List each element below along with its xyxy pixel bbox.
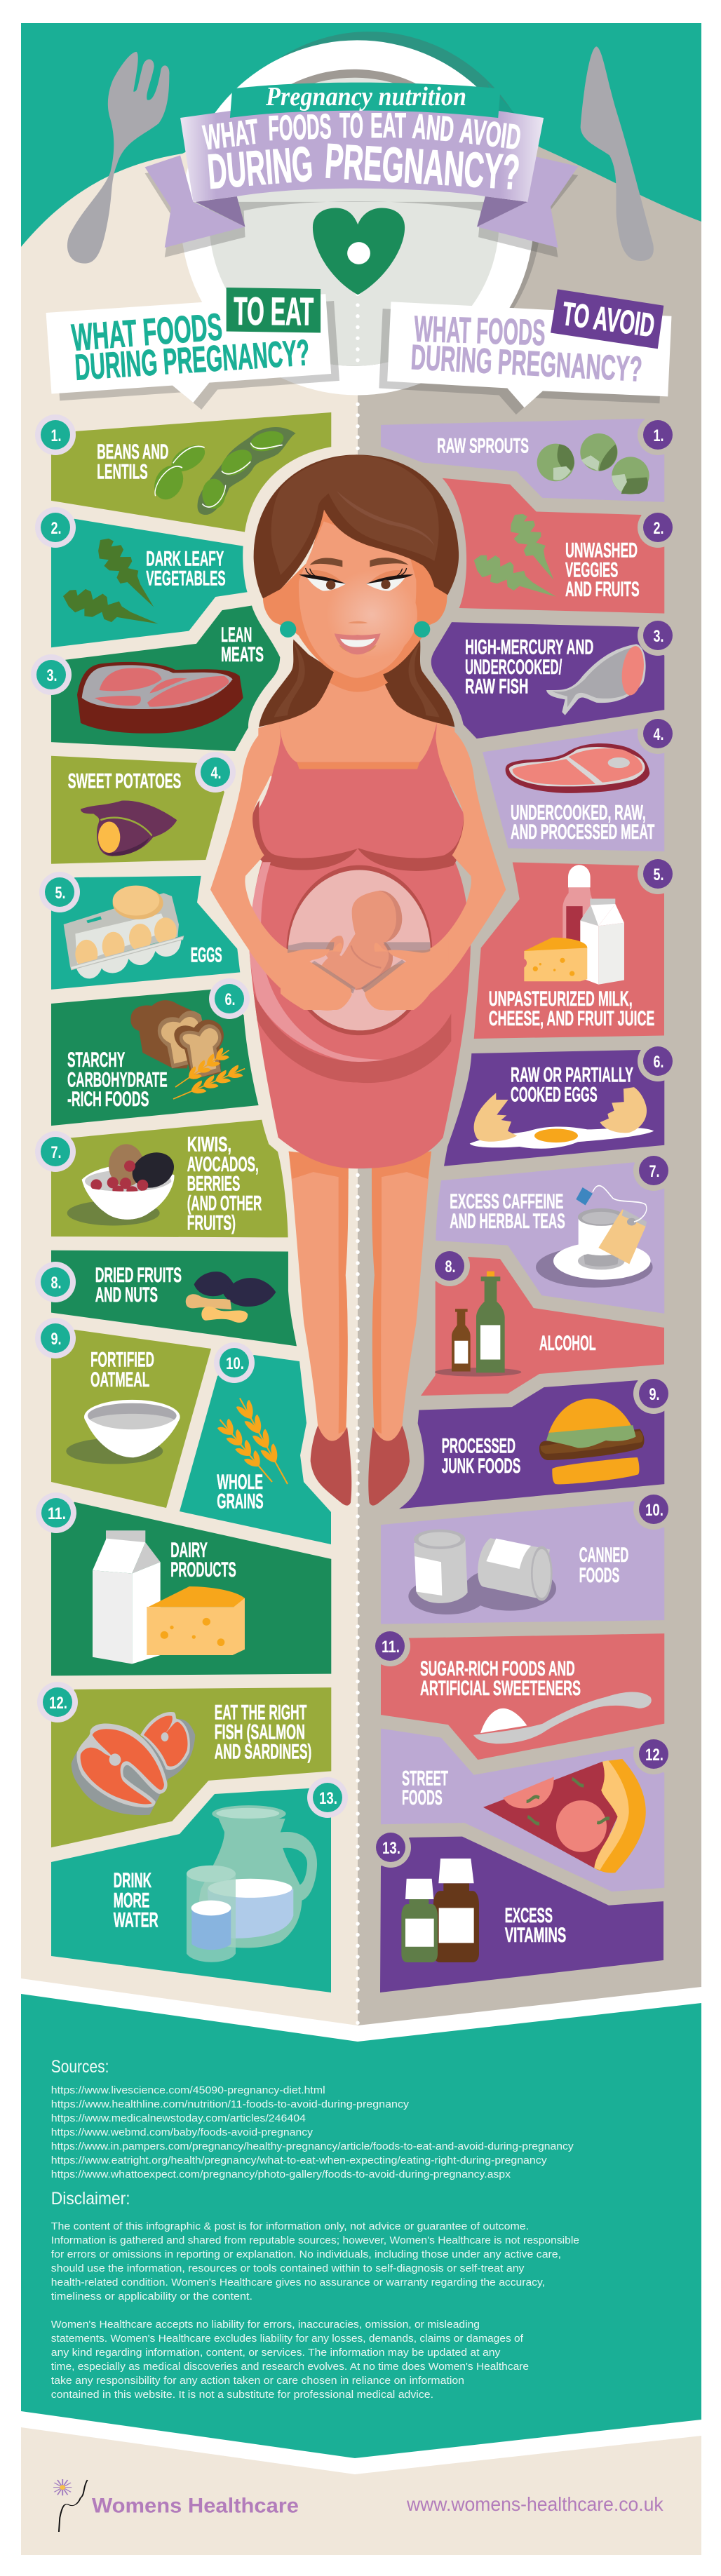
panel: avoid 3 raw fish (431, 615, 678, 739)
panel: 4 sweet potatoes (51, 752, 236, 864)
panel: avoid 12 street foods (381, 1729, 674, 1891)
sources panel (21, 1994, 701, 2458)
disclaimer paragraph 1: should use the information, resources or tools contained within to self-diagnosis or self-treat any (51, 2263, 525, 2274)
mouth (335, 633, 381, 654)
belly band shadow (254, 993, 451, 1083)
badge: 10. (645, 1501, 663, 1520)
label (95, 1264, 182, 1307)
badge: 1. (50, 426, 62, 445)
badge (633, 1373, 674, 1414)
label: AND SARDINES) (215, 1741, 311, 1763)
icon: leaves (469, 508, 566, 607)
source list (51, 2084, 574, 2180)
label (215, 1701, 311, 1763)
label (511, 801, 654, 844)
label: DRIED FRUITS (95, 1264, 182, 1287)
heading: main title: TO (339, 106, 363, 145)
heading: main title: DURING (205, 136, 315, 199)
badge: 1. (654, 426, 663, 445)
brows (310, 558, 409, 567)
label: ARTIFICIAL SWEETENERS (420, 1677, 581, 1700)
source list: https://www.whattoexpect.com/pregnancy/photo-gallery/foods-to-avoid-during-pregnancy.aspx (51, 2169, 511, 2180)
disclaimer paragraph 2: any kind regarding information, content, or services. The information may be updated at any (51, 2347, 501, 2359)
label: MEATS (221, 643, 264, 666)
label: EGGS (191, 944, 222, 967)
disclaimer paragraph 1 (51, 2220, 579, 2302)
badge: 12. (49, 1694, 67, 1713)
badge: 7. (649, 1162, 659, 1181)
disclaimer paragraph 1: The content of this infographic & post is for information only, not advice or guarantee of outcome. (51, 2220, 529, 2232)
label (505, 1904, 566, 1947)
badge (35, 1131, 76, 1172)
label (114, 1869, 159, 1932)
label (90, 1348, 154, 1391)
icon: fork (67, 52, 169, 264)
icon: prunes and nuts (186, 1272, 276, 1323)
badge (638, 414, 678, 455)
label (565, 539, 640, 601)
label: AND HERBAL TEAS (450, 1210, 565, 1233)
hair highlight (271, 454, 439, 575)
disclaimer paragraph 1: timeliness or applicability or the content. (51, 2291, 252, 2302)
disclaimer paragraph 1: health-related condition. Women's Healthcare gives no assurance or warranty regarding the accuracy, (51, 2277, 545, 2288)
icon: womens healthcare logo (53, 2479, 88, 2532)
speech bubble: to eat: TO EAT (234, 289, 314, 334)
label (221, 623, 264, 666)
heading: main title: AVOID (458, 111, 523, 157)
badge: 13. (382, 1839, 400, 1858)
panel: avoid 2 unwashed veggies (443, 478, 678, 614)
label: VITAMINS (505, 1924, 566, 1947)
icon: milk and cheese (93, 1530, 245, 1664)
disclaimer paragraph 2: statements. Women's Healthcare excludes liability for any losses, demands, claims or damages of (51, 2333, 524, 2345)
label: LEAN (221, 623, 252, 647)
panel: avoid 10 canned foods (381, 1489, 674, 1624)
label: RAW SPROUTS (437, 435, 529, 458)
label: DRINK (114, 1869, 151, 1892)
label: WHOLE (217, 1471, 263, 1494)
heading: main title: PREGNANCY? (323, 133, 521, 200)
source list: https://www.medicalnewstoday.com/articles/246404 (51, 2112, 306, 2124)
icon: raw meat (506, 743, 649, 793)
heading: main title: EAT (370, 106, 406, 145)
speech bubble: to avoid: WHAT FOODS (414, 309, 546, 353)
label: BERRIES (187, 1173, 240, 1195)
badge: 13. (319, 1789, 337, 1808)
badge: 11. (382, 1638, 400, 1657)
label: PRODUCTS (170, 1558, 236, 1582)
label: SWEET POTATOES (68, 770, 181, 793)
face (299, 521, 416, 678)
label: FOODS (402, 1786, 443, 1809)
icon: oatmeal bowl (66, 1400, 180, 1464)
icon: bread (130, 1000, 224, 1079)
label (420, 1657, 581, 1700)
badge (35, 1262, 76, 1302)
background: left beige hill (21, 83, 358, 2025)
label: COOKED EGGS (511, 1083, 598, 1106)
badge: 7. (50, 1143, 62, 1162)
badge (209, 978, 250, 1019)
label: DAIRY (170, 1539, 208, 1562)
fetus (321, 891, 402, 990)
source list: https://www.in.pampers.com/pregnancy/healthy-pregnancy/article/foods-to-eat-and-avoid-during-pregnancy (51, 2140, 574, 2152)
icon: leaves (60, 532, 165, 635)
eyes (299, 568, 413, 591)
icon: egg carton (64, 886, 184, 978)
icon: salmon steaks (72, 1712, 195, 1815)
label: FRUITS) (187, 1211, 236, 1234)
nose (348, 621, 368, 623)
icon: vitamin bottles (401, 1859, 479, 1962)
icon: steak (77, 662, 243, 734)
badge: 11. (48, 1504, 66, 1523)
label (579, 1544, 628, 1587)
hair strand (337, 491, 434, 546)
badge: 9. (649, 1385, 659, 1404)
badge (31, 654, 72, 695)
source list: https://www.eatright.org/health/pregnancy/what-to-eat-when-expecting/eating-right-during-pregnancy (51, 2154, 547, 2166)
badge: 8. (50, 1274, 62, 1293)
head (254, 454, 459, 692)
badge (638, 713, 678, 754)
label (146, 547, 226, 591)
label (97, 440, 168, 484)
icon: burger (539, 1398, 645, 1484)
badge (35, 1318, 76, 1358)
panel: 2 dark leafy vegetables (35, 507, 248, 647)
label: FISH (SALMON (215, 1720, 305, 1744)
disclaimer paragraph 1: for errors or omissions in reporting or explanation. No individuals, including those under any active care, (51, 2248, 561, 2260)
dress and belly (249, 723, 471, 1168)
label: STARCHY (67, 1048, 125, 1072)
badge (214, 1342, 255, 1383)
arms (210, 723, 506, 1011)
icon: fruit bowl (67, 1144, 176, 1225)
background: right grey hill (358, 83, 701, 2025)
icon: sprouts (537, 433, 649, 494)
disclaimer paragraph 2: take any responsibility for any action taken or care chosen in reliance on information (51, 2375, 464, 2387)
panel: avoid 4 processed meat (483, 713, 678, 851)
label (170, 1539, 236, 1582)
badge: 5. (55, 884, 66, 903)
speech bubble: to eat: WHAT FOODS (70, 306, 224, 359)
label: OATMEAL (90, 1368, 149, 1391)
label: ALCOHOL (539, 1332, 596, 1355)
label (217, 1471, 264, 1513)
panel: 3 lean meats (31, 605, 280, 751)
badge (35, 414, 76, 455)
badge: 6. (224, 990, 236, 1009)
icon: sweet potato (81, 800, 177, 856)
disclaimer paragraph 2: contained in this website. It is not a substitute for professional medical advice. (51, 2389, 433, 2401)
dress (249, 723, 471, 1168)
badge (36, 1492, 76, 1533)
label: CANNED (579, 1544, 628, 1567)
label: AND NUTS (95, 1283, 158, 1307)
badge: 3. (46, 666, 58, 685)
head side shade (281, 510, 435, 677)
icon: knife (581, 46, 654, 261)
icon: fish (546, 643, 647, 715)
hands (281, 938, 449, 1010)
heading: main title: FOODS (267, 107, 332, 148)
brand name: Womens Healthcare (92, 2495, 299, 2518)
panel: avoid 8 alcohol (421, 1246, 664, 1396)
icon: wheat (214, 1394, 294, 1488)
badge (370, 1827, 411, 1868)
badge (633, 1489, 674, 1530)
heading: sources: Sources: (51, 2057, 109, 2077)
panel: 1 beans and lentils (35, 412, 331, 532)
panel: avoid 5 unpasteurized milk (474, 854, 678, 1039)
label: BEANS AND (97, 440, 168, 464)
badge (39, 872, 80, 912)
badge: 3. (654, 627, 663, 646)
badge (633, 1734, 674, 1774)
badge (638, 615, 678, 656)
hair (254, 454, 459, 598)
disclaimer paragraph 1: Information is gathered and shared from reputable sources; however, Women's Healthcare is not responsible (51, 2234, 579, 2246)
label (187, 1133, 262, 1234)
label: JUNK FOODS (442, 1455, 520, 1478)
label: VEGGIES (565, 558, 618, 581)
plate (181, 32, 541, 395)
panel: 13 drink more water (51, 1777, 348, 1992)
label: FOODS (579, 1564, 619, 1587)
earrings (280, 621, 430, 638)
badge (37, 1682, 78, 1722)
icon: cans (408, 1530, 556, 1614)
label: -RICH FOODS (67, 1088, 149, 1111)
label (450, 1190, 565, 1233)
badge (638, 507, 678, 548)
bust shadow (252, 800, 464, 871)
source list: https://www.livescience.com/45090-pregnancy-diet.html (51, 2084, 325, 2096)
icon: water jug and glass (187, 1805, 312, 1962)
label (489, 987, 654, 1030)
label (67, 1048, 168, 1111)
panel: avoid 9 junk foods (399, 1373, 674, 1509)
label: LENTILS (97, 461, 148, 484)
label (511, 1064, 633, 1106)
label: KIWIS, (187, 1133, 231, 1156)
label: RAW OR PARTIALLY (511, 1064, 633, 1087)
badge: 6. (654, 1053, 663, 1072)
label: AVOCADOS, (187, 1153, 259, 1176)
cutlery (67, 46, 654, 264)
badge (638, 1041, 678, 1081)
label: VEGETABLES (146, 567, 226, 591)
panel: avoid 6 raw eggs (444, 1041, 678, 1166)
panel: 10 whole grains (180, 1342, 331, 1544)
badge: 12. (645, 1746, 663, 1765)
woman illustration (210, 454, 506, 1506)
badge: 9. (50, 1330, 62, 1349)
panel: 11 dairy products (36, 1492, 331, 1675)
label: RAW FISH (465, 675, 528, 699)
source list: https://www.healthline.com/nutrition/11-foods-to-avoid-during-pregnancy (51, 2098, 410, 2110)
label: WATER (114, 1909, 159, 1932)
badge: 10. (226, 1354, 244, 1373)
icon: bottle, milk and cheese (524, 865, 624, 985)
label (402, 1767, 448, 1809)
label: EAT THE RIGHT (215, 1701, 306, 1725)
icon: cracked egg (470, 1087, 654, 1149)
heading: disclaimer: Disclaimer: (51, 2189, 130, 2209)
panel: 5 eggs (39, 872, 240, 990)
heading: main title: AND (411, 107, 456, 149)
badge: 4. (654, 725, 663, 744)
label: SUGAR-RICH FOODS AND (420, 1657, 575, 1680)
heading: main title: WHAT (201, 112, 261, 157)
badge: 4. (210, 764, 222, 783)
disclaimer paragraph 2: time, especially as medical discoveries and research evolves. At no time does Women's Healthcare (51, 2361, 529, 2373)
label: PROCESSED (442, 1435, 516, 1458)
badge (195, 752, 236, 793)
icon: bottles (435, 1272, 521, 1377)
cheek glow (326, 570, 417, 659)
badge (638, 854, 678, 894)
speech bubble: to eat (46, 288, 339, 410)
icon: wheat (171, 1045, 248, 1105)
icon: beans (150, 427, 296, 515)
panel: avoid 1 raw sprouts (381, 414, 678, 502)
belly window (288, 868, 431, 1033)
dotted centre line (356, 272, 360, 2023)
label: DARK LEAFY (146, 547, 224, 570)
badge (370, 1626, 410, 1666)
label: UNDERCOOKED/ (465, 656, 562, 679)
title ribbon (145, 82, 578, 257)
panel: avoid 13 excess vitamins (370, 1827, 663, 1992)
neck shadow (330, 671, 388, 692)
label (442, 1435, 520, 1478)
icon: spoon of sugar (473, 1692, 652, 1744)
disclaimer paragraph 2: Women's Healthcare accepts no liability for errors, inaccuracies, omission, or misleading (51, 2319, 480, 2331)
speech bubble: to eat: DURING PREGNANCY? (74, 332, 311, 389)
panel: 12 salmon and sardines (37, 1682, 331, 1847)
panel: avoid 11 sugar-rich foods (370, 1626, 664, 1760)
badge (307, 1777, 348, 1818)
badge: 2. (50, 519, 62, 538)
badge: 5. (654, 865, 663, 884)
heart icon (313, 208, 405, 295)
label: (AND OTHER (187, 1192, 262, 1215)
panel: 8 dried fruits and nuts (35, 1250, 297, 1346)
heading: main title (201, 106, 523, 200)
label: FORTIFIED (90, 1348, 154, 1371)
speech bubble: to avoid (379, 289, 671, 414)
badge (429, 1246, 470, 1286)
panel: 9 fortified oatmeal (35, 1318, 211, 1508)
website url: www.womens-healthcare.co.uk (406, 2493, 664, 2515)
badge: 2. (654, 519, 663, 538)
label: CARBOHYDRATE (67, 1068, 168, 1091)
panel: 6 starchy carbohydrate-rich foods (51, 978, 259, 1126)
label: HIGH-MERCURY AND (465, 636, 593, 659)
label: GRAINS (217, 1490, 264, 1513)
speech bubble: to avoid: TO AVOID (560, 295, 657, 344)
disclaimer paragraph 2 (51, 2319, 529, 2401)
legs and shoes (289, 1152, 431, 1506)
label: EXCESS (505, 1904, 553, 1927)
label (465, 636, 593, 699)
belly highlight (249, 862, 428, 1065)
badge: 8. (445, 1257, 456, 1276)
ears (263, 587, 447, 638)
label: AND FRUITS (565, 578, 640, 601)
source list: https://www.webmd.com/baby/foods-avoid-pregnancy (51, 2126, 314, 2138)
badge (35, 507, 76, 548)
label: EXCESS CAFFEINE (450, 1190, 563, 1213)
label: STREET (402, 1767, 448, 1790)
label: UNWASHED (565, 539, 638, 562)
background: top teal (21, 23, 701, 304)
panel: 7 kiwis, avocados, berries (35, 1120, 288, 1237)
label: MORE (114, 1889, 149, 1912)
chest and hair locks (258, 640, 454, 776)
panel: avoid 7 caffeine (436, 1150, 674, 1314)
badge (633, 1150, 674, 1191)
neckline shadow (297, 762, 419, 769)
icon: tea cup (536, 1186, 653, 1288)
heading: pregnancy nutrition: Pregnancy nutrition (265, 82, 466, 112)
footer (21, 2427, 701, 2555)
icon: pizza (483, 1759, 646, 1873)
